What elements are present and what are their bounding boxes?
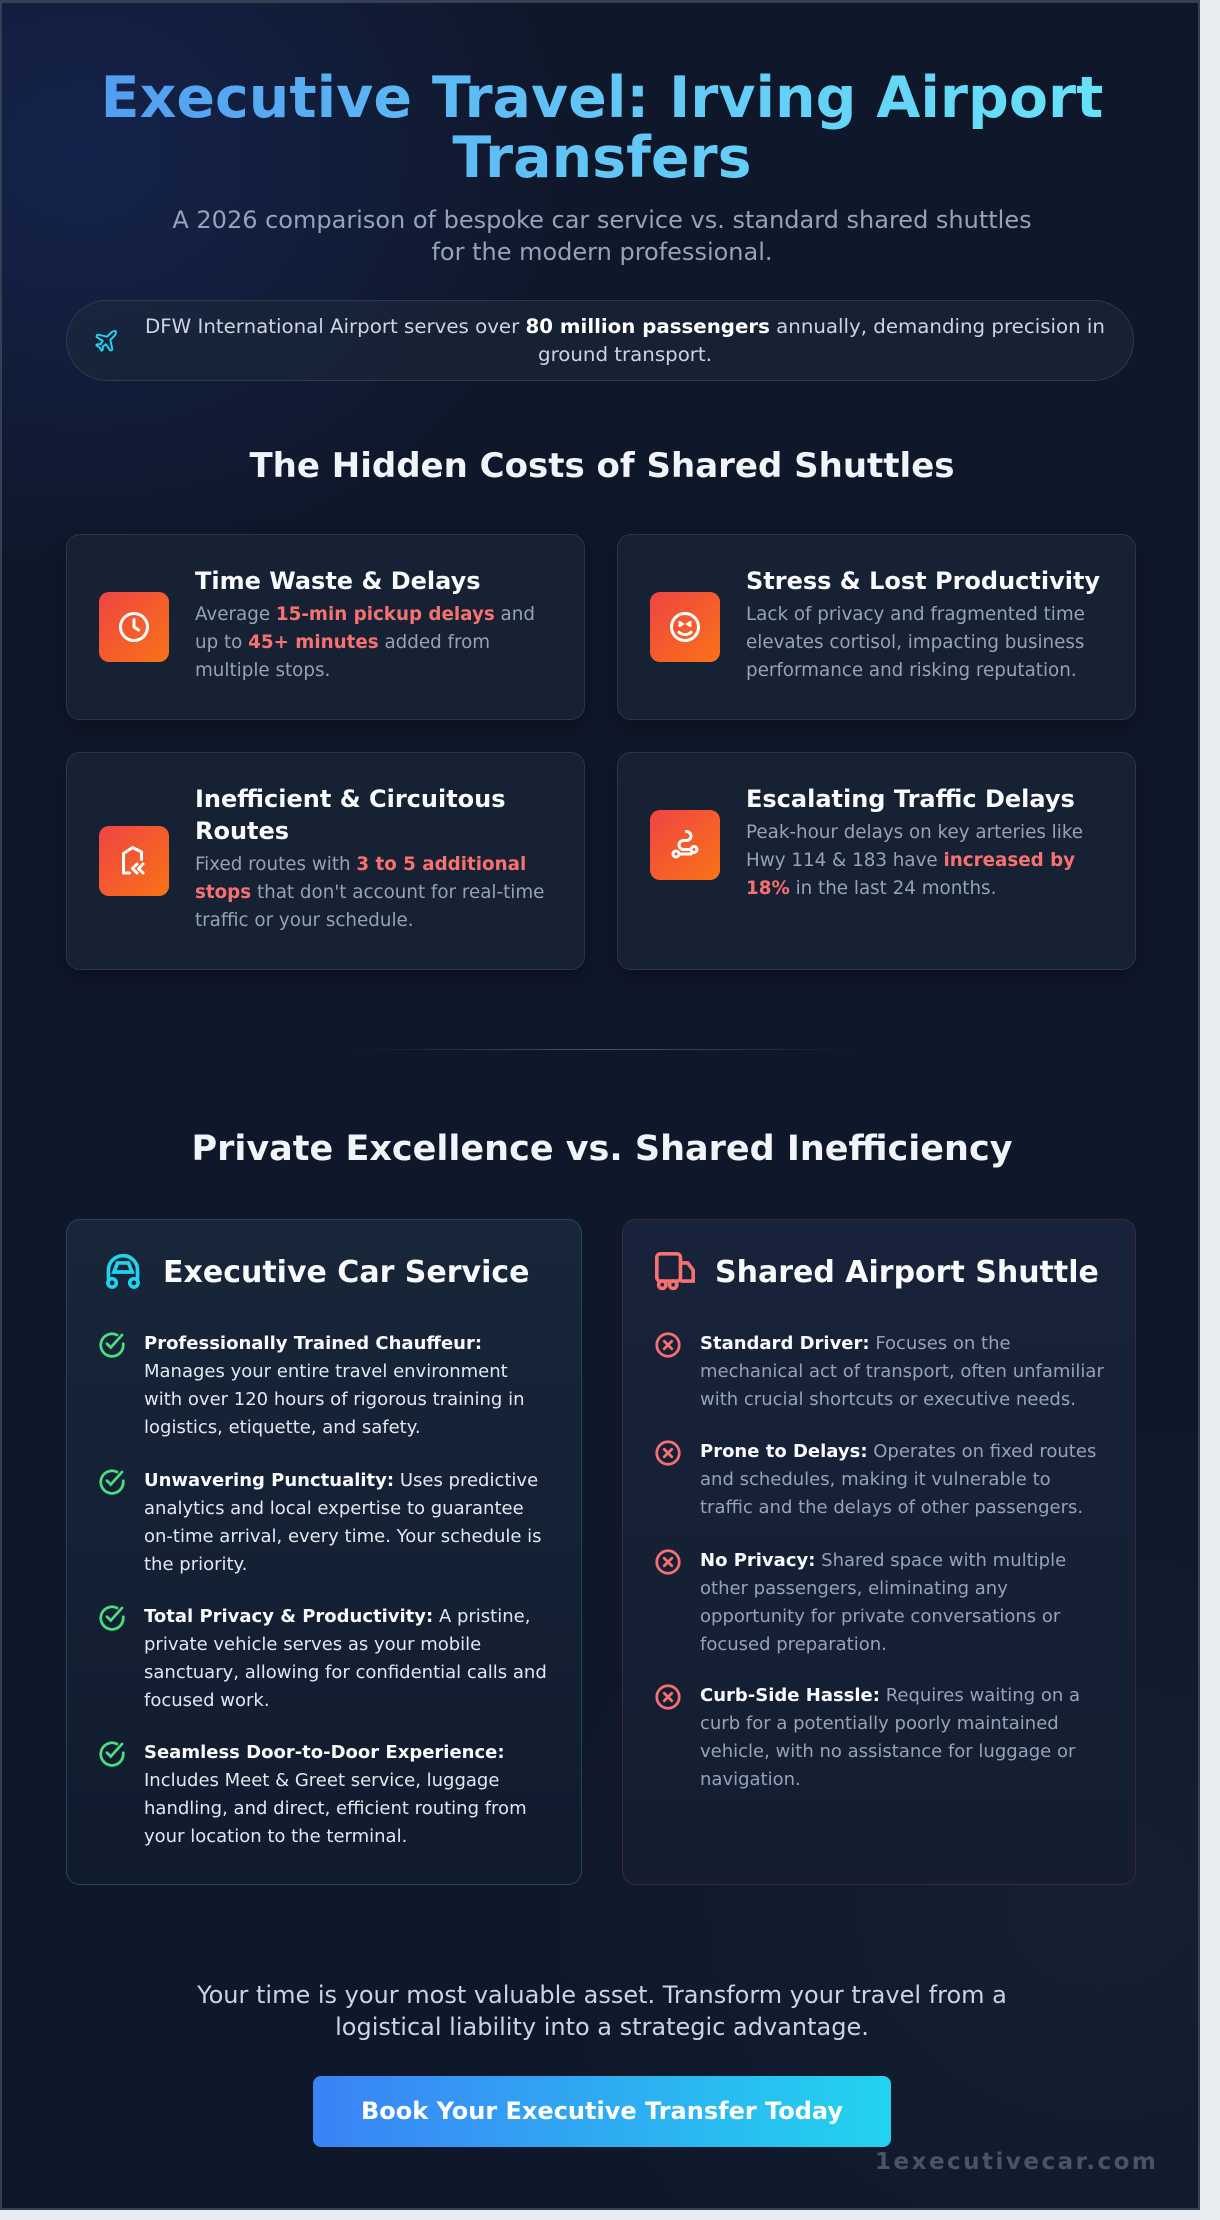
card: stress: Lack of privacy and fragmented time elevates cortisol, impacting business performance and risking reputation. (746, 604, 1085, 681)
panel heading: Shared Airport Shuttle (715, 1254, 1099, 1290)
icon: face (650, 592, 720, 662)
card: time waste (66, 534, 585, 720)
heading: comparison: Private Excellence vs. Shared Inefficiency (191, 1129, 1013, 1169)
card: routes: Inefficient & Circuitous Routes (195, 785, 506, 845)
item: Standard Driver: Focuses on the mechanical act of transport, often unfamiliar with crucial shortcuts or executive needs. (700, 1333, 1104, 1410)
heading: hidden costs: The Hidden Costs of Shared Shuttles (249, 446, 955, 486)
icon: road (650, 810, 720, 880)
card: traffic: Peak-hour delays on key arteries like Hwy 114 & 183 have increased by 18% in the last 24 months. (746, 822, 1083, 899)
panel: shared shuttle (622, 1219, 1136, 1885)
button: CTA (313, 2076, 891, 2147)
card: traffic (617, 752, 1136, 970)
subtitle: for the modern professional. (431, 238, 773, 266)
callout: DFW stat (66, 300, 1134, 381)
card: time waste: Average 15-min pickup delays and up to 45+ minutes added from multiple stops. (195, 604, 535, 681)
closing text (197, 1981, 1007, 2041)
card: time waste: Time Waste & Delays (195, 567, 481, 595)
item: Seamless Door-to-Door Experience: Includes Meet & Greet service, luggage handling, and direct, efficient routing from your location to the terminal. (144, 1742, 527, 1847)
card: stress: Stress & Lost Productivity (746, 567, 1100, 595)
title: Transfers (452, 125, 752, 191)
panel heading: Executive Car Service (163, 1254, 530, 1290)
closing text: logistical liability into a strategic advantage. (335, 2013, 869, 2041)
watermark: 1executivecar.com (875, 2149, 1158, 2175)
item: Curb-Side Hassle: Requires waiting on a curb for a potentially poorly maintained vehicle, with no assistance for luggage or navigation. (700, 1685, 1080, 1790)
subtitle (172, 206, 1032, 266)
title (2, 68, 1202, 188)
callout: DFW stat: DFW International Airport serves over 80 million passengers annually, demanding precision in ground transport. (145, 315, 1105, 366)
item: Prone to Delays: Operates on fixed routes and schedules, making it vulnerable to traffic and the delays of other passengers. (700, 1441, 1096, 1518)
card: stress (617, 534, 1136, 720)
item: Unwavering Punctuality: Uses predictive analytics and local expertise to guarantee on-time arrival, every time. Your schedule is the priority. (144, 1470, 542, 1575)
item: No Privacy: Shared space with multiple other passengers, eliminating any opportunity for private conversations or focused preparation. (700, 1550, 1066, 1655)
button: CTA: Book Your Executive Transfer Today (361, 2097, 843, 2125)
subtitle: A 2026 comparison of bespoke car service vs. standard shared shuttles (172, 206, 1032, 234)
card: traffic: Escalating Traffic Delays (746, 785, 1075, 813)
item: Total Privacy & Productivity: A pristine, private vehicle serves as your mobile sanctuary, allowing for confidential calls and focused work. (144, 1606, 547, 1711)
panel: executive car service (66, 1219, 582, 1885)
icon: plane (95, 330, 117, 352)
closing text: Your time is your most valuable asset. Transform your travel from a (197, 1981, 1007, 2009)
title: Executive Travel: Irving Airport (101, 65, 1103, 131)
card: routes (66, 752, 585, 970)
icon: route (99, 826, 169, 896)
item: Professionally Trained Chauffeur: Manages your entire travel environment with over 120 hours of rigorous training in logistics, etiquette, and safety. (144, 1333, 524, 1438)
icon: clock (99, 592, 169, 662)
card: routes: Fixed routes with 3 to 5 additional stops that don't account for real-time traffic or your schedule. (195, 854, 544, 931)
